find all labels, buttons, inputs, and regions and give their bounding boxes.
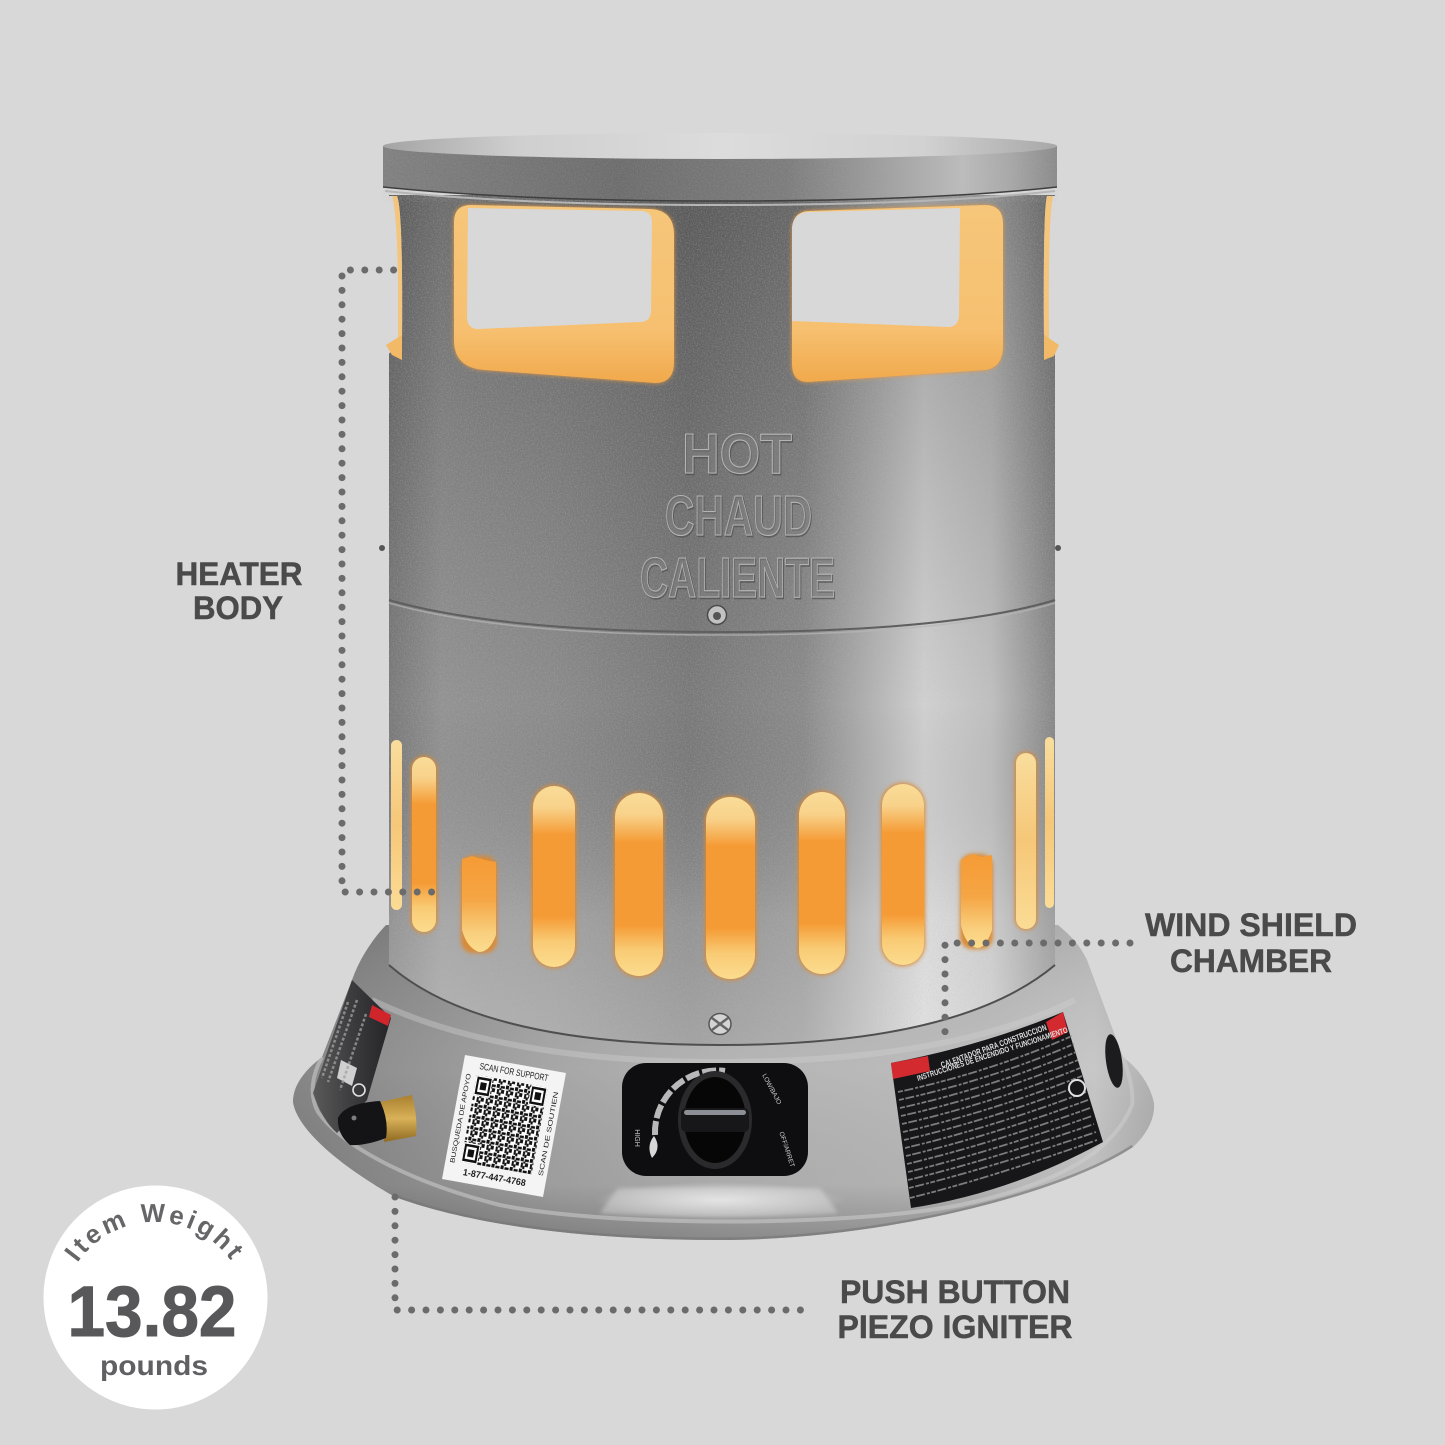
heater product illustration [293,133,1154,1240]
right instruction label: CALENTADOR PARA CONSTRUCCION [939,1022,1048,1070]
callout: wind shield chamber [945,907,1357,1045]
gas inlet fitting [338,1095,416,1145]
control knob panel: OFF/ARRET [777,1131,795,1168]
label: wind shield chamber [1145,907,1357,979]
heater base [293,925,1154,1240]
QR code [461,1075,548,1174]
upper right vent window [792,205,1003,382]
right instruction label: INSTRUCCIONES DE ENCENDIDO Y FUNCIONAMIENTO [916,1026,1069,1083]
label: heater body: HEATER [176,556,302,592]
label: push button piezo igniter: PUSH BUTTON [840,1274,1070,1310]
embossed HOT CHAUD CALIENTE lettering: HOT [683,424,793,488]
callout: push button piezo igniter [395,1197,1072,1345]
cylinder body [389,195,1055,1045]
control knob panel: LOW/BAJO [760,1073,782,1106]
badge unit: pounds: pounds [100,1350,208,1381]
label: heater body: BODY [193,590,283,626]
right instruction label [891,1012,1103,1208]
label: heater body [176,556,302,626]
QR support sticker: SCAN FOR SUPPORT [479,1060,549,1083]
QR support sticker: BUSQUEDA DE APOYO [448,1073,473,1164]
embossed HOT CHAUD CALIENTE lettering: CHAUD [665,484,812,548]
left warning label [313,980,391,1133]
badge value: 13.82: 13.82 [68,1273,236,1352]
label: push button piezo igniter [838,1274,1072,1345]
right side vent hole [1102,1033,1126,1089]
cylinder lid [383,133,1057,205]
body screws [379,545,1061,1034]
edge side openings [384,196,1059,360]
embossed HOT CHAUD CALIENTE lettering: CHAUD [666,486,813,550]
control knob panel [622,1063,808,1176]
label: wind shield chamber: CHAMBER [1170,943,1332,979]
leader line: heater body [342,270,442,892]
embossed HOT CHAUD CALIENTE lettering: CALIENTE [640,546,835,610]
upper left vent window [454,205,674,383]
lower vent slots [391,737,1054,980]
rotary knob [678,1071,752,1169]
leader line: wind shield chamber [945,943,1130,1045]
embossed HOT CHAUD CALIENTE lettering: HOT [682,422,792,486]
QR support sticker: SCAN DE SOUTIEN [536,1091,560,1177]
label: push button piezo igniter: PIEZO IGNITER [838,1309,1072,1345]
badge: item weight [44,1186,268,1410]
embossed HOT CHAUD CALIENTE lettering: CALIENTE [641,548,836,612]
leader line: push button piezo igniter [395,1197,808,1310]
base glare highlight [595,1182,845,1218]
label: wind shield chamber: WIND SHIELD [1145,907,1357,943]
QR support sticker: 1-877-447-4768 [462,1166,527,1188]
QR support sticker [442,1055,566,1197]
callout: heater body [176,270,442,892]
control knob panel: HIGH [633,1129,640,1147]
embossed HOT CHAUD CALIENTE lettering [640,422,836,612]
badge caption: item weight: Item Weight [64,1204,242,1262]
